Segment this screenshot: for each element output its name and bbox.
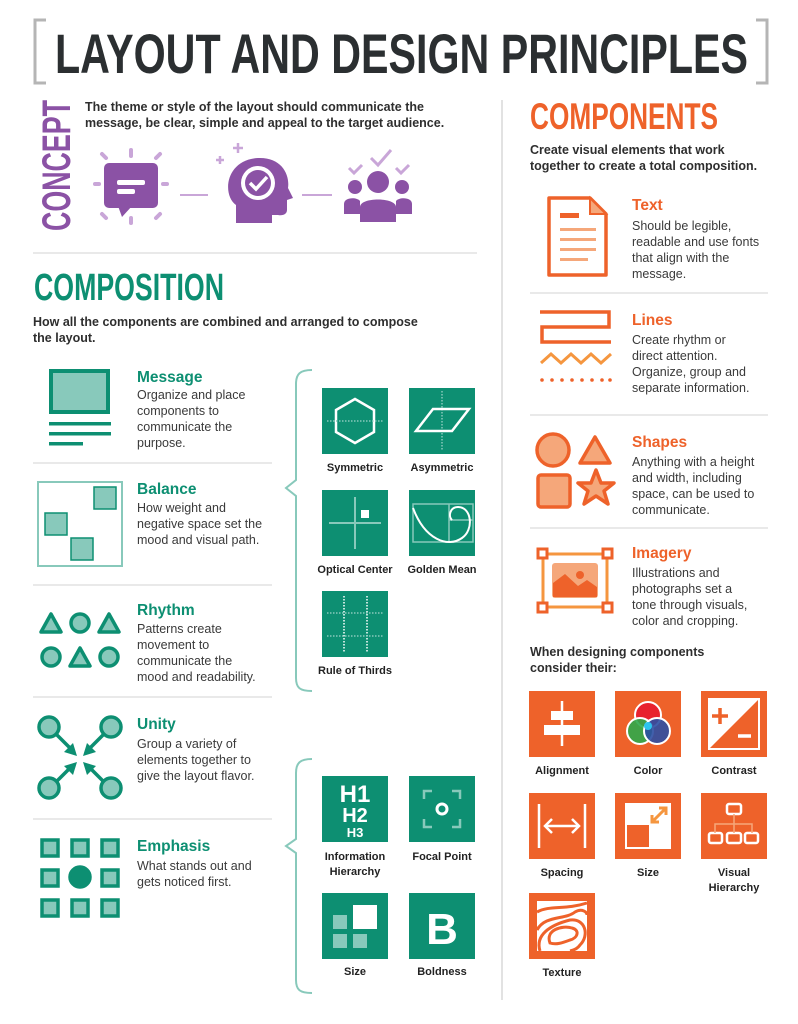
row: unity: give the layout flavor. — [137, 769, 254, 783]
row: rhythm — [41, 602, 256, 684]
row: shapes: space, can be used to — [632, 487, 754, 501]
tile: alignment — [529, 691, 595, 777]
row: text: that align with the — [632, 251, 729, 265]
row: shapes: Anything with a height — [632, 455, 754, 469]
tile: focal point: Focal Point — [412, 851, 472, 863]
composition text: the layout. — [33, 331, 96, 345]
concept text: The theme or style of the layout should communicate the — [85, 100, 424, 114]
row: balance: negative space set the — [137, 517, 262, 531]
tile: golden mean: Golden Mean — [407, 564, 477, 576]
row: emphasis: What stands out and — [137, 859, 252, 873]
row: text: Should be legible, — [632, 219, 731, 233]
tile: rule of thirds: Rule of Thirds — [318, 665, 392, 677]
tile: size: Size — [637, 867, 659, 879]
row: shapes: and width, including — [632, 471, 742, 485]
tile: visual hierarchy — [701, 793, 767, 894]
tile: asymmetric — [409, 388, 475, 474]
row: imagery: tone through visuals, — [632, 598, 747, 612]
row: rhythm: communicate the — [137, 654, 232, 668]
row: message: Message — [137, 369, 203, 386]
row: imagery: Imagery — [632, 545, 692, 562]
row: balance — [38, 481, 262, 566]
row: rhythm: movement to — [137, 638, 209, 652]
tile: optical center: Optical Center — [317, 564, 393, 576]
consider text: consider their: — [530, 661, 617, 675]
tile: size — [615, 793, 681, 879]
row: shapes: communicate. — [632, 503, 710, 517]
row: lines: direct attention. — [632, 349, 717, 363]
row: rhythm: mood and readability. — [137, 670, 256, 684]
row: emphasis: Emphasis — [137, 838, 210, 855]
tile: rule of thirds — [318, 591, 392, 677]
row: unity — [39, 716, 254, 798]
row: rhythm: Rhythm — [137, 602, 195, 619]
tile: information hierarchy: H3 — [347, 825, 363, 840]
row: balance: How weight and — [137, 501, 226, 515]
icon: emphasis — [42, 840, 118, 916]
heading: components: COMPONENTS — [530, 96, 718, 137]
tile: information hierarchy: H1 — [340, 781, 370, 808]
tile: information hierarchy: Hierarchy — [330, 866, 381, 878]
row: message: components to — [137, 404, 219, 418]
row: message — [49, 369, 245, 450]
tile: asymmetric: Asymmetric — [411, 462, 473, 474]
icon: rhythm — [41, 614, 119, 666]
tile: boldness — [409, 893, 475, 978]
components text: together to create a total composition. — [530, 159, 757, 173]
tile: boldness: Boldness — [417, 966, 467, 978]
tile: color: Color — [634, 765, 663, 777]
row: balance: Balance — [137, 481, 197, 498]
row: text — [549, 197, 759, 281]
icon: imagery — [538, 549, 612, 612]
tile: information hierarchy: H2 — [342, 805, 368, 827]
tile: contrast — [701, 691, 767, 777]
tile: size: Size — [344, 966, 366, 978]
row: text: readable and use fonts — [632, 235, 759, 249]
tile: spacing — [529, 793, 595, 879]
row: text: message. — [632, 267, 686, 281]
tile: color — [615, 691, 681, 777]
icon: head with check — [216, 143, 293, 223]
row: message: Organize and place — [137, 388, 245, 402]
tile: information hierarchy — [322, 776, 388, 878]
tile: spacing: Spacing — [541, 867, 583, 879]
row: unity: elements together to — [137, 753, 251, 767]
icon: lines — [540, 312, 612, 382]
icon: people — [344, 150, 412, 222]
icon: unity — [39, 717, 121, 798]
row: imagery: photographs set a — [632, 582, 732, 596]
row: lines: Organize, group and — [632, 365, 746, 379]
panel: concept — [35, 100, 444, 231]
tile: information hierarchy: Information — [325, 851, 385, 863]
row: imagery: Illustrations and — [632, 566, 720, 580]
tile: focal point — [409, 776, 475, 863]
row: message: purpose. — [137, 436, 186, 450]
row: unity: Group a variety of — [137, 737, 236, 751]
icon: speech bubble — [95, 150, 167, 223]
tile: visual hierarchy: Hierarchy — [709, 882, 760, 894]
tile: golden mean — [407, 490, 477, 576]
bracket: emphasis types — [286, 759, 312, 993]
row: emphasis — [42, 838, 252, 916]
tile: optical center — [317, 490, 393, 576]
heading: concept: CONCEPT — [35, 100, 79, 231]
icon: shapes — [537, 434, 614, 507]
bracket: balance types — [286, 370, 312, 691]
tile: contrast: Contrast — [711, 765, 757, 777]
row: imagery — [538, 545, 747, 628]
row: lines: separate information. — [632, 381, 749, 395]
row: shapes: Shapes — [632, 434, 687, 451]
row: imagery: color and cropping. — [632, 614, 738, 628]
heading: composition: COMPOSITION — [34, 267, 224, 309]
icon: balance — [38, 482, 122, 566]
tile: visual hierarchy: Visual — [718, 867, 750, 879]
tile: size — [322, 893, 388, 978]
row: text: Text — [632, 197, 663, 214]
tile: texture: Texture — [543, 967, 581, 979]
tile: texture — [529, 893, 595, 979]
consider text: When designing components — [530, 645, 704, 659]
concept text: message, be clear, simple and appeal to the target audience. — [85, 116, 444, 130]
icon: message — [49, 371, 111, 446]
row: rhythm: Patterns create — [137, 622, 222, 636]
row: message: communicate the — [137, 420, 232, 434]
icon: document — [549, 198, 606, 275]
row: lines: Create rhythm or — [632, 333, 726, 347]
row: emphasis: gets noticed first. — [137, 875, 232, 889]
composition text: How all the components are combined and arranged to compose — [33, 315, 418, 329]
tile: boldness: B — [426, 905, 458, 954]
row: lines: Lines — [632, 312, 672, 329]
row: unity: Unity — [137, 716, 176, 733]
row: shapes — [537, 434, 755, 517]
components text: Create visual elements that work — [530, 143, 725, 157]
row: lines — [540, 312, 749, 395]
tile: symmetric — [322, 388, 388, 474]
tile: alignment: Alignment — [535, 765, 589, 777]
tile: symmetric: Symmetric — [327, 462, 383, 474]
row: balance: mood and visual path. — [137, 533, 259, 547]
